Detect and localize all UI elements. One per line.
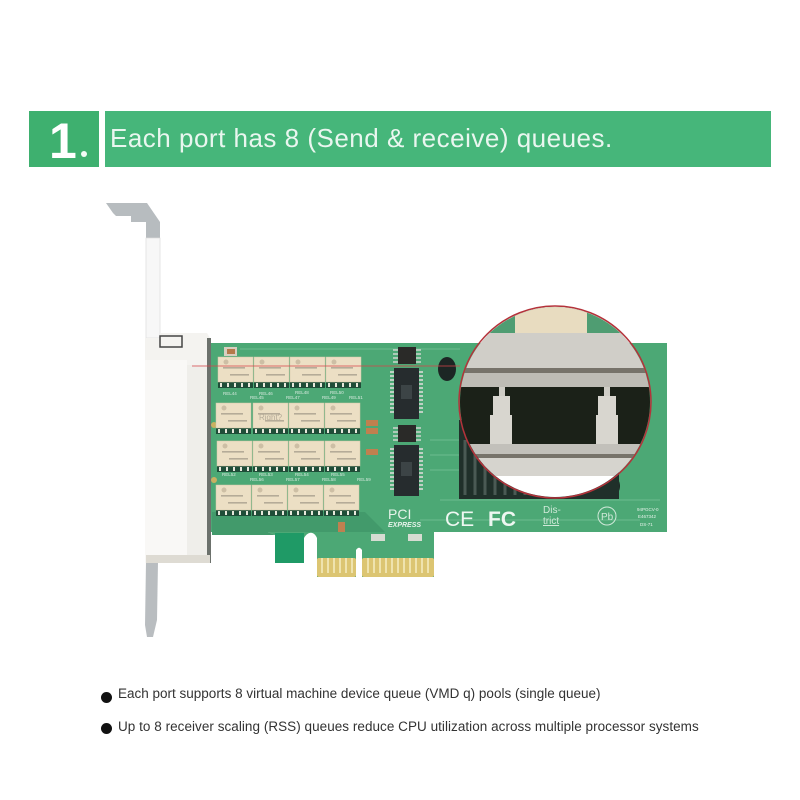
relay silkscreen labels: REL59 bbox=[357, 477, 371, 482]
board markings: FC bbox=[488, 508, 516, 531]
relay silkscreen labels: REL49 bbox=[322, 395, 336, 400]
heatsink bbox=[459, 420, 619, 499]
relay modules: Right? bbox=[259, 413, 283, 422]
number badge bbox=[29, 111, 99, 167]
relay silkscreen labels: REL47 bbox=[286, 395, 300, 400]
relay silkscreen labels: REL54 bbox=[295, 472, 309, 477]
relay silkscreen labels: REL56 bbox=[250, 477, 264, 482]
controller chips bbox=[390, 347, 620, 496]
relay silkscreen labels: REL53 bbox=[259, 472, 273, 477]
ethernet port housing bbox=[145, 333, 211, 563]
relay silkscreen labels: REL50 bbox=[330, 390, 344, 395]
board markings: E467342 bbox=[638, 514, 657, 519]
relay silkscreen labels: REL55 bbox=[331, 472, 345, 477]
board markings: PCI bbox=[388, 506, 411, 522]
relay silkscreen labels: REL46 bbox=[259, 391, 273, 396]
relay silkscreen labels: REL58 bbox=[322, 477, 336, 482]
relay silkscreen labels bbox=[222, 390, 371, 482]
bullet two: Up to 8 receiver scaling (RSS) queues reduce CPU utilization across multiple processor systems bbox=[118, 719, 699, 734]
network card illustration bbox=[106, 203, 667, 637]
relay modules bbox=[216, 357, 361, 516]
red marker line bbox=[192, 365, 460, 367]
number badge: 1 bbox=[49, 113, 77, 169]
bullet one: Each port supports 8 virtual machine device queue (VMD q) pools (single queue) bbox=[118, 686, 601, 701]
gold edge connectors bbox=[317, 558, 434, 577]
relay silkscreen labels: REL45 bbox=[250, 395, 264, 400]
mounting bracket bbox=[106, 203, 160, 637]
board markings: Pb bbox=[601, 512, 614, 523]
relay silkscreen labels: REL52 bbox=[222, 472, 236, 477]
board markings: trict bbox=[543, 516, 559, 527]
magnified port inset bbox=[459, 306, 651, 500]
title bar: Each port has 8 (Send & receive) queues. bbox=[110, 123, 613, 153]
capacitor and small parts bbox=[211, 347, 422, 541]
board markings: Dis- bbox=[543, 505, 561, 516]
board markings: DS-71 bbox=[640, 522, 653, 527]
board markings: EXPRESS bbox=[388, 522, 421, 529]
title bar bbox=[105, 111, 771, 167]
relay silkscreen labels: REL51 bbox=[349, 395, 363, 400]
relay silkscreen labels: REL44 bbox=[223, 391, 237, 396]
board markings: CE bbox=[445, 508, 474, 531]
relay silkscreen labels: REL57 bbox=[286, 477, 300, 482]
board markings bbox=[388, 505, 659, 531]
circuit board bbox=[210, 343, 667, 577]
relay silkscreen labels: REL48 bbox=[295, 390, 309, 395]
board markings: 94PGCV-0 bbox=[637, 507, 659, 512]
